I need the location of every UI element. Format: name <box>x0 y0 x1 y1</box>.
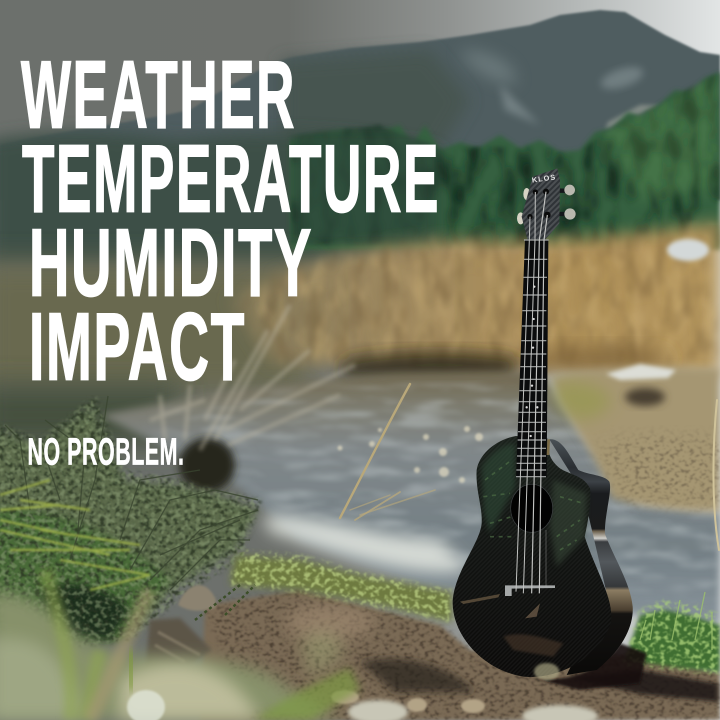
headline: IMPACT <box>29 293 246 400</box>
ukulele sound hole <box>511 484 553 532</box>
tagline: NO PROBLEM. <box>28 432 184 474</box>
grass blades <box>0 480 150 590</box>
headline: HUMIDITY <box>29 209 313 316</box>
foreground: sage shrub <box>0 395 265 650</box>
background: pine forest <box>290 70 720 250</box>
background: far right bank <box>552 364 720 515</box>
ukulele headstock <box>522 168 560 239</box>
background: dark left treeline <box>0 132 440 265</box>
headline: WEATHER <box>21 41 296 148</box>
background: riverside grass <box>225 545 720 680</box>
ukulele tuners <box>517 185 576 224</box>
foreground: blurred bottom-left greenery <box>0 570 360 720</box>
ukulele bridge <box>505 585 555 596</box>
background: blurred pale reeds and dark tuft <box>150 305 355 492</box>
foreground: rocks <box>145 585 216 670</box>
foreground blur patch over body <box>534 663 559 680</box>
background: dirt ground <box>200 580 720 720</box>
ukulele strings <box>516 192 547 593</box>
ukulele body side <box>549 439 633 675</box>
headline <box>21 41 440 400</box>
background: left meadow haze <box>0 262 310 445</box>
ukulele body front <box>453 436 611 677</box>
background: dry reed stalks <box>340 384 719 550</box>
background: distant mountain <box>0 10 720 200</box>
foreground: small sprigs <box>195 585 255 620</box>
ukulele carbon weave <box>453 436 611 677</box>
background: river <box>100 372 720 625</box>
ukulele ground shadow <box>520 643 647 690</box>
ukulele <box>453 168 647 690</box>
shrub branches <box>5 396 258 590</box>
ukulele reflections <box>460 444 587 657</box>
shrub foliage texture <box>0 395 265 650</box>
ukulele neck <box>516 239 550 477</box>
background: dry golden reeds <box>230 220 720 378</box>
headstock logo: KLOS <box>531 172 557 185</box>
